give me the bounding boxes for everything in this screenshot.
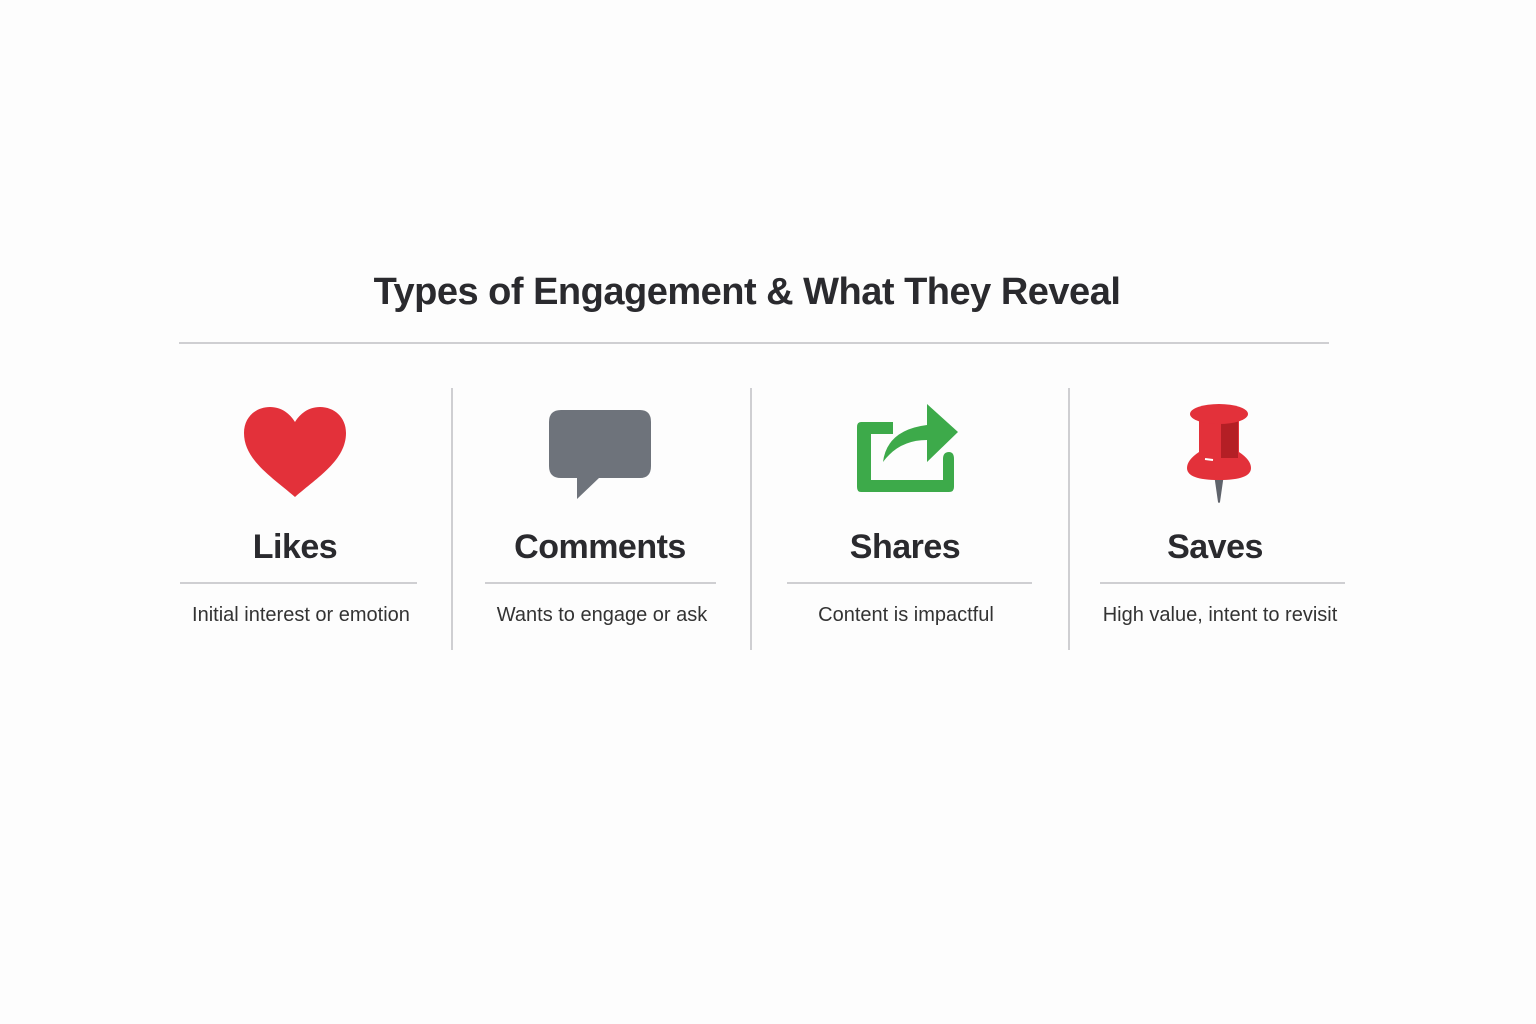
label: Shares: Shares [850, 528, 960, 566]
description: Initial interest or emotion [192, 604, 410, 626]
icon: speech bubble [549, 410, 651, 499]
label: Comments: Comments [514, 528, 686, 566]
panel: likes [180, 407, 417, 626]
description: Wants to engage or ask [497, 604, 707, 626]
label: Saves: Saves [1167, 528, 1263, 566]
panel: shares [787, 404, 1032, 626]
title: Types of Engagement & What They Reveal [374, 271, 1120, 313]
icon: pushpin [1187, 404, 1251, 503]
label: Likes: Likes [253, 528, 337, 566]
icon: heart [244, 407, 346, 497]
panel: saves [1100, 404, 1345, 626]
description: Content is impactful [818, 604, 994, 626]
panel: comments [485, 410, 716, 626]
description: High value, intent to revisit [1103, 604, 1337, 626]
icon: share arrow [857, 404, 958, 492]
